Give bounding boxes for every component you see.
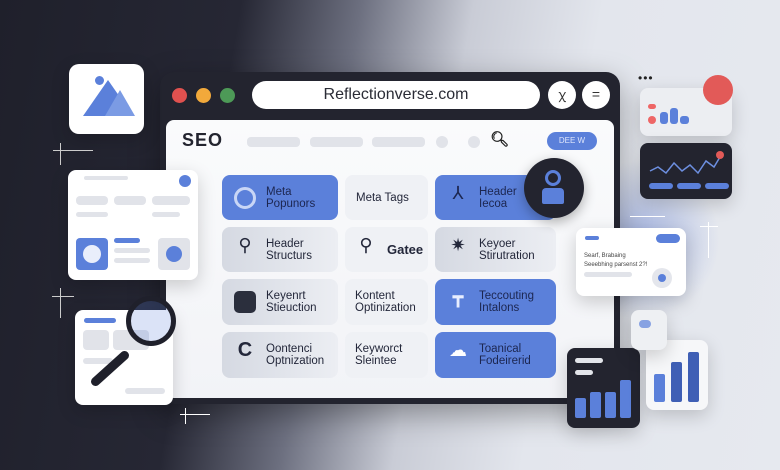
grid of SEO cells: ⅄	[452, 182, 464, 202]
grid of SEO cells: C	[238, 339, 252, 361]
small card	[631, 310, 667, 350]
grid of SEO cells: Optnization	[266, 355, 324, 367]
panel: left form card	[68, 170, 198, 280]
icon: user badge	[524, 158, 584, 218]
grid of SEO cells: Oontenci	[266, 343, 312, 355]
grid of SEO cells: Kontent	[355, 290, 395, 302]
grid of SEO cells: ⚲	[359, 234, 373, 254]
grid of SEO cells: Gatee	[387, 242, 423, 256]
icon buttons: ꭓ	[558, 87, 566, 102]
glow blue	[560, 160, 720, 320]
grid of SEO cells: Toanical	[479, 343, 521, 355]
grid of SEO cells: ✷	[450, 234, 466, 254]
grid of SEO cells: Stieuction	[266, 302, 317, 314]
address bar: Reflectionverse.com	[324, 86, 468, 103]
icon: magnifying glass	[91, 301, 176, 386]
nav header	[182, 130, 597, 150]
grid of SEO cells: ┳	[453, 287, 463, 307]
browser window: =	[592, 86, 600, 102]
grid of SEO cells: Meta Tags	[356, 192, 409, 204]
panel: light bar chart	[646, 340, 708, 410]
grid of SEO cells	[222, 175, 556, 378]
nav header: SEO	[182, 130, 223, 150]
grid of SEO cells: Header	[479, 186, 517, 198]
window dots	[172, 88, 235, 103]
grid of SEO cells: Iecoa	[479, 198, 507, 210]
grid of SEO cells: ⚲	[238, 234, 252, 254]
grid of SEO cells: Sleintee	[355, 355, 397, 367]
panel: line chart card	[640, 143, 732, 199]
grid of SEO cells: Intalons	[479, 302, 519, 314]
grid of SEO cells: Popunors	[266, 198, 315, 210]
dots: •••	[638, 71, 654, 85]
nav header: DEE W	[559, 136, 585, 145]
browser window	[160, 72, 620, 404]
grid of SEO cells: Fodeirerid	[479, 355, 531, 367]
address bar	[252, 81, 540, 109]
panel: bottom-left card	[75, 310, 173, 405]
grid of SEO cells: Header	[266, 238, 304, 250]
grid of SEO cells: Keyoer	[479, 238, 515, 250]
grid of SEO cells: Keyenrt	[266, 290, 306, 302]
panel: top-right bar chart card	[640, 88, 732, 136]
icon buttons	[548, 81, 576, 109]
icon: red notification	[703, 75, 733, 105]
grid of SEO cells: Optinization	[355, 302, 416, 314]
content area	[166, 120, 614, 398]
nav header: 🔍︎	[490, 131, 509, 148]
grid of SEO cells: Structurs	[266, 250, 312, 262]
grid of SEO cells: Keyworct	[355, 343, 402, 355]
panel: search card	[576, 228, 686, 296]
grid of SEO cells: Stirutration	[479, 250, 535, 262]
grid of SEO cells: Teccouting	[479, 290, 534, 302]
panel: search card: Searf, Brabaing	[584, 253, 626, 259]
grid of SEO cells: Meta	[266, 186, 292, 198]
panel: search card: Seeebhing parsenst 2?!	[584, 262, 647, 268]
grid of SEO cells: ☁	[449, 340, 467, 360]
crosshair decorations	[53, 150, 93, 151]
icon: image card	[69, 64, 144, 134]
panel: dark bar chart	[567, 348, 640, 428]
